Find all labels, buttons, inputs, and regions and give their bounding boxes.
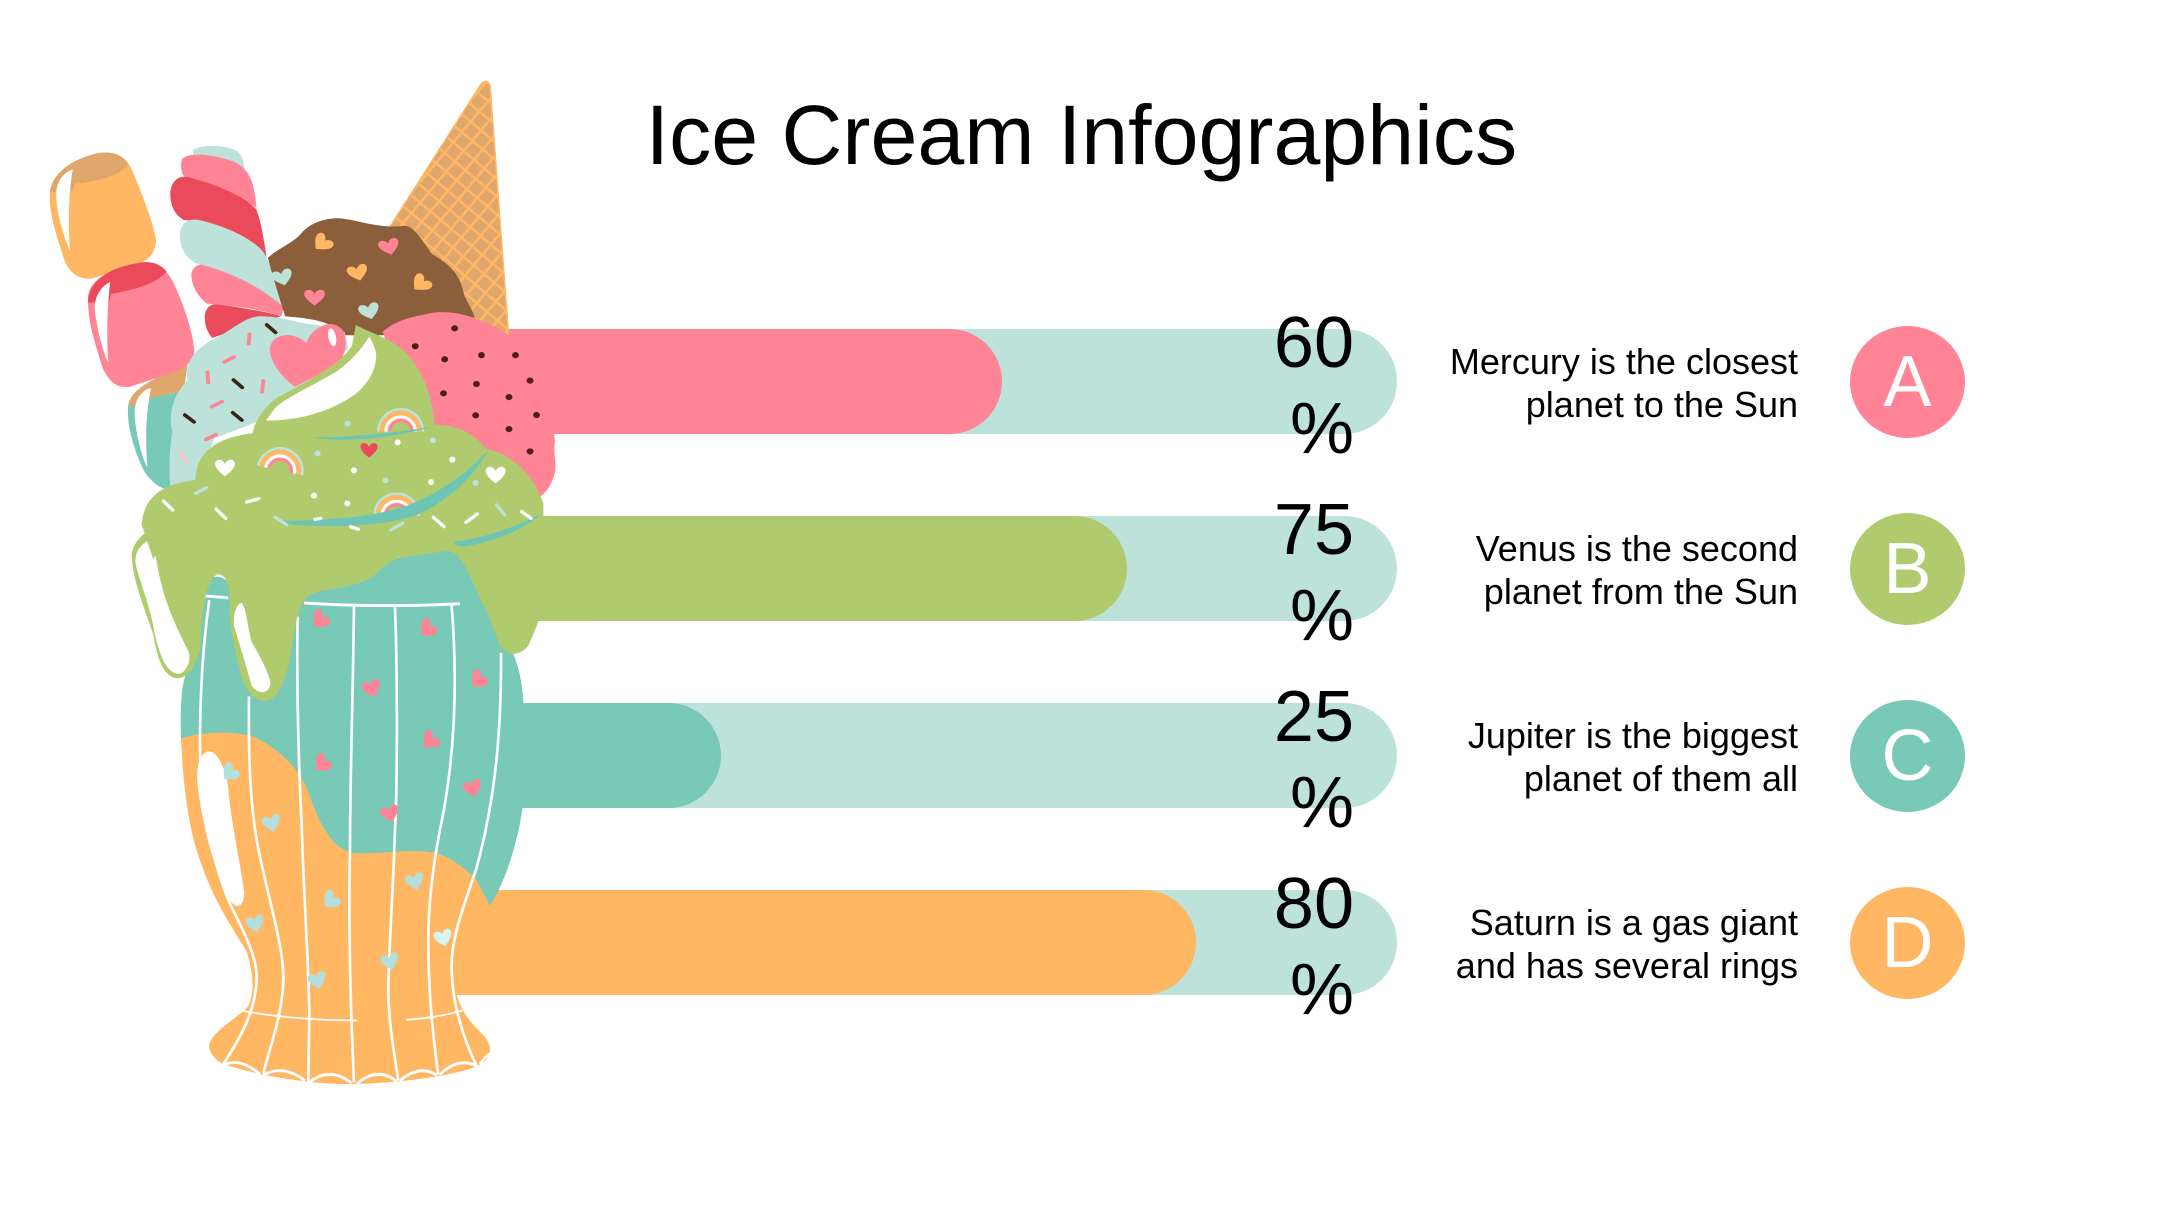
- badge B: [1850, 513, 1965, 625]
- progress track C: [400, 703, 1397, 808]
- frosting sprinkles: [163, 488, 531, 530]
- description D: [1456, 902, 1798, 986]
- value C: [1274, 677, 1354, 843]
- progress track D: [400, 890, 1397, 995]
- progress fill A: [400, 329, 1002, 434]
- progress fill B: [400, 516, 1127, 621]
- value D: %: [1290, 950, 1354, 1030]
- value B: %: [1290, 576, 1354, 656]
- description C: planet of them all: [1524, 758, 1798, 799]
- description B: planet from the Sun: [1484, 571, 1798, 612]
- badge A: [1850, 326, 1965, 438]
- melting frosting drips: [132, 522, 600, 701]
- row D: 80%: [456, 864, 1965, 1030]
- icon: twisted marshmallow: [170, 146, 284, 338]
- icon: orange popsicle: [50, 153, 156, 279]
- row C: 25%: [522, 677, 1965, 843]
- description B: [1476, 528, 1798, 612]
- glass flute lines: [200, 596, 501, 1084]
- pink hearts on glass: [308, 608, 490, 825]
- icon: chocolate scoop with hearts: [268, 218, 475, 335]
- icon: pink scoop with dots: [383, 312, 555, 497]
- value D: [1274, 864, 1354, 1030]
- badge D: [1850, 887, 1965, 999]
- description A: [1450, 341, 1798, 425]
- frosting highlight: [266, 337, 376, 421]
- progress fill D: [400, 890, 1196, 995]
- description D: Saturn is a gas giant: [1470, 902, 1798, 942]
- description A: Mercury is the closest: [1450, 341, 1798, 382]
- description D: and has several rings: [1456, 944, 1798, 986]
- icon: teal popsicle: [128, 364, 188, 490]
- badge C: C: [1882, 716, 1934, 796]
- progress fill C: [400, 703, 720, 808]
- value A: [1274, 303, 1354, 469]
- green frosting swirl: [142, 325, 543, 559]
- value A: %: [1290, 389, 1354, 469]
- row A: 60%: [508, 303, 1965, 469]
- value A: 60: [1274, 303, 1354, 383]
- description C: Jupiter is the biggest: [1468, 715, 1798, 756]
- badge C: [1850, 700, 1965, 812]
- teal swirl lines: [282, 426, 543, 547]
- value C: 25: [1274, 677, 1354, 757]
- frosting dots: [311, 421, 479, 506]
- icon: pink popsicle: [88, 262, 194, 387]
- glass highlight: [197, 751, 244, 906]
- toppings and frosting top: [50, 146, 555, 497]
- value D: 80: [1274, 864, 1354, 944]
- glass body: [132, 522, 600, 1084]
- badge D: D: [1882, 903, 1934, 983]
- rainbows: [258, 409, 423, 516]
- progress track A: [400, 329, 1397, 434]
- frosting hearts: [215, 443, 506, 483]
- value B: [1274, 490, 1354, 656]
- row B: 75%: [400, 490, 1965, 656]
- value B: 75: [1274, 490, 1354, 570]
- description C: [1468, 715, 1798, 799]
- value C: %: [1290, 763, 1354, 843]
- icon: pink heart candy: [270, 324, 346, 387]
- badge B: B: [1883, 529, 1932, 609]
- orange milkshake layer: [181, 733, 490, 1084]
- icon: mint scoop with sprinkles: [170, 316, 348, 487]
- teal milkshake layer: [181, 551, 526, 906]
- description B: Venus is the second: [1476, 528, 1798, 569]
- progress track B: [400, 516, 1397, 621]
- frosting shape: [142, 325, 543, 559]
- icon: waffle cone: [390, 82, 508, 335]
- description A: planet to the Sun: [1526, 384, 1798, 425]
- frosting decorations: [163, 409, 543, 547]
- teal hearts on glass: [218, 760, 454, 991]
- title: Ice Cream Infographics: [646, 88, 1517, 182]
- badge A: A: [1883, 342, 1932, 422]
